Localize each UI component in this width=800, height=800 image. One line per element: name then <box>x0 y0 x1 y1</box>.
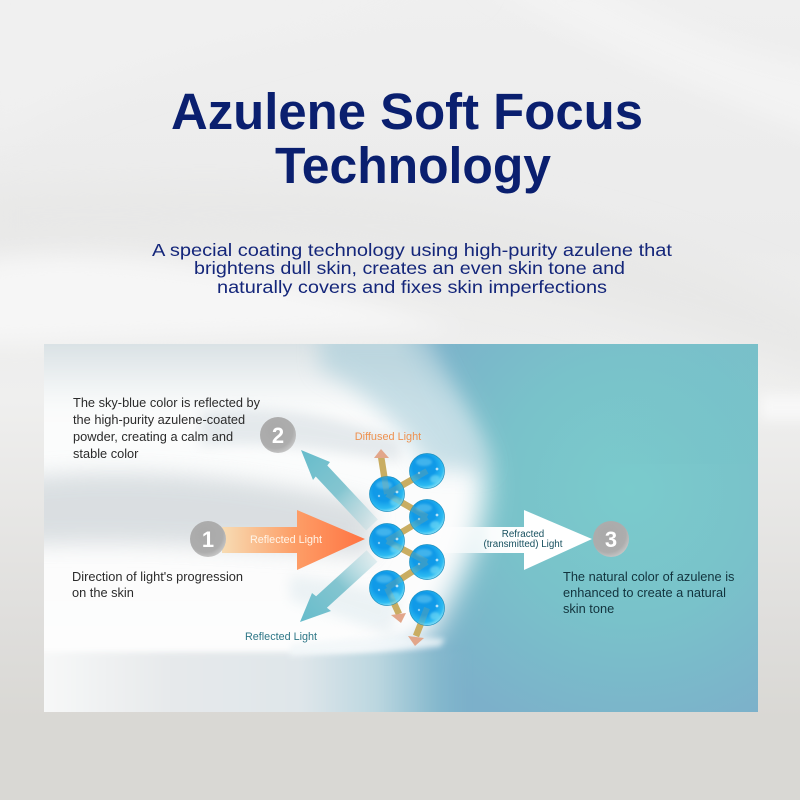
arrow: reflected light upward <box>301 450 378 530</box>
badge 2: 2 <box>272 423 284 448</box>
connector glints over spheres <box>384 471 427 636</box>
label: refracted light: (transmitted) Light <box>484 539 563 550</box>
label: diffused light: Diffused Light <box>355 431 421 443</box>
label: orange arrow: Reflected Light <box>250 534 322 546</box>
panel: light diagram <box>44 344 758 712</box>
label: refracted light <box>484 529 563 550</box>
arrow: incoming orange light <box>222 510 365 570</box>
subtitle: brightens dull skin, creates an even skin tone and <box>194 258 625 278</box>
text: step 2 description: stable color <box>73 446 139 461</box>
subtitle <box>152 240 672 297</box>
text: step 3 description: The natural color of azulene is <box>563 569 734 584</box>
text: step 1 description <box>72 569 243 600</box>
badge 1: 1 <box>202 527 214 552</box>
subtitle: naturally covers and fixes skin imperfections <box>217 277 607 297</box>
title <box>171 83 643 194</box>
text: step 3 description: skin tone <box>563 601 614 616</box>
title: Technology <box>275 137 552 194</box>
arrow: reflected light downward <box>300 550 377 622</box>
badge 2 <box>260 417 296 453</box>
title: Azulene Soft Focus <box>171 83 643 140</box>
text: step 1 description: Direction of light's progression <box>72 569 243 584</box>
panel background <box>44 344 758 712</box>
label: reflected light: Reflected Light <box>245 631 317 643</box>
arrow: refracted light <box>440 510 592 570</box>
badge 3 <box>593 521 629 557</box>
text: step 3 description: enhanced to create a natural <box>563 585 726 600</box>
text: step 2 description: The sky-blue color is reflected by <box>73 395 261 410</box>
diffusion connectors <box>381 456 427 636</box>
text: step 2 description: the high-purity azulene-coated <box>73 412 245 427</box>
badge 1 <box>190 521 226 557</box>
text: step 2 description <box>73 395 261 461</box>
azulene spheres <box>370 454 444 626</box>
text: step 3 description <box>563 569 734 616</box>
small arrowheads <box>374 449 424 646</box>
label: refracted light: Refracted <box>502 529 544 540</box>
subtitle: A special coating technology using high-purity azulene that <box>152 240 672 260</box>
text: step 2 description: powder, creating a calm and <box>73 429 233 444</box>
badge 3: 3 <box>605 527 617 552</box>
text: step 1 description: on the skin <box>72 585 134 600</box>
